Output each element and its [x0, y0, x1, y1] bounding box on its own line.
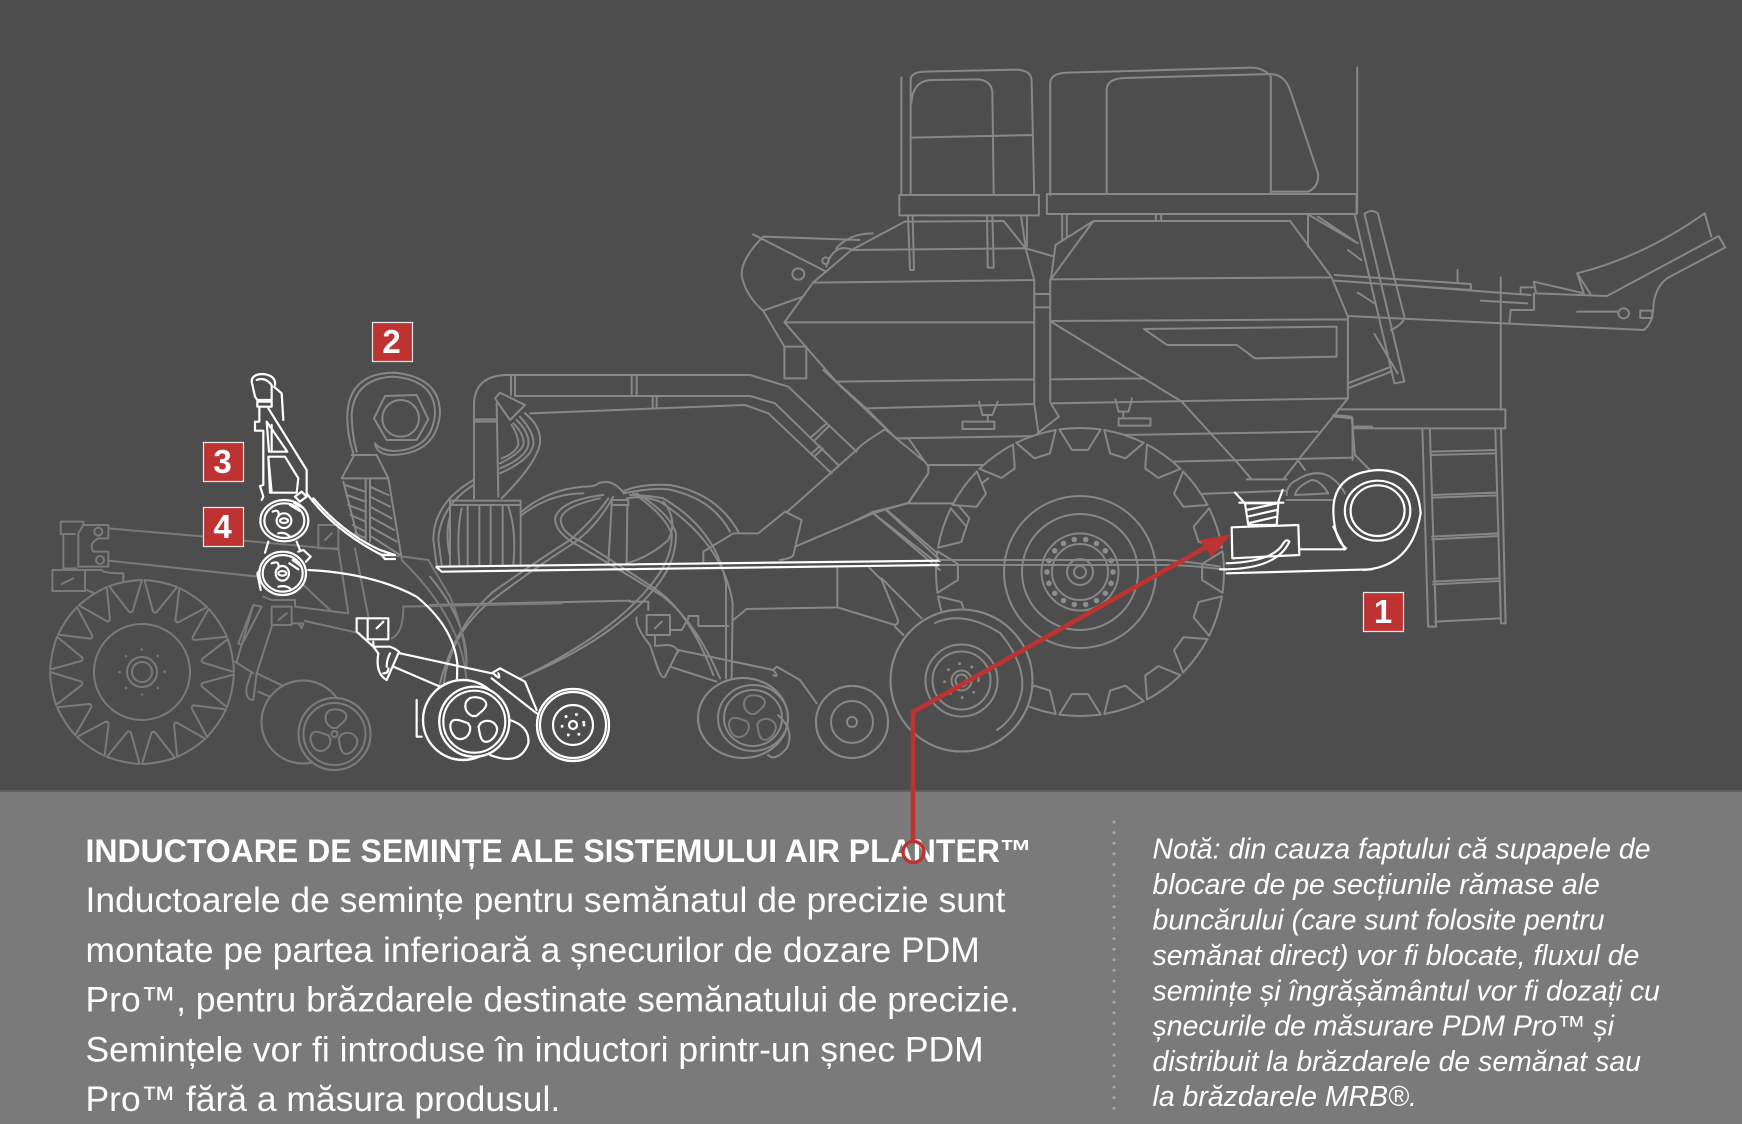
rear opener: gray disc and gauge wheel [698, 678, 888, 758]
note text block: semănat direct) vor fi blocate, fluxul de [1152, 940, 1639, 972]
badge 2: 2 [382, 323, 401, 360]
gray hose continuation through tire [940, 560, 1227, 570]
arrow: callout from heading to seed meter [903, 534, 1231, 862]
white highlighted seed hoses [437, 561, 940, 572]
badge 3: 3 [213, 443, 232, 480]
hopper funnel and lower structure [850, 415, 1372, 567]
inductor column, highlighted [252, 374, 395, 595]
pipes, hoses and central frame [430, 370, 940, 703]
blower and auger [342, 373, 440, 558]
panel: dark illustration background [0, 0, 1742, 792]
panel: lower text background [0, 792, 1742, 1124]
note text block: la brăzdarele MRB®. [1152, 1081, 1417, 1113]
ladder [1422, 428, 1506, 627]
main text block: montate pe partea inferioară a șnecurilor de dozare PDM [86, 930, 980, 970]
seed hose to opener [308, 570, 537, 759]
main text block: Pro™ fără a măsura produsul. [86, 1079, 560, 1119]
note text block: buncărului (care sunt folosite pentru [1152, 904, 1605, 936]
note text block: Notă: din cauza faptului că supapele de [1152, 834, 1651, 866]
main text block [86, 880, 1019, 1119]
note text block: semințe și îngrășământul vor fi dozați cu [1152, 976, 1660, 1008]
highlighted opener discs [423, 680, 609, 761]
dotted divider [1112, 822, 1116, 1110]
seed meter, auger and fan, highlighted [1220, 490, 1372, 573]
left hitch frame and packer wheels [52, 522, 562, 700]
wheel: front gauge wheel [890, 610, 1032, 752]
rear tractor wheel [49, 579, 235, 765]
main text block: Semințele vor fi introduse în inductori printr-un șnec PDM [86, 1030, 984, 1070]
note text block: șnecurile de măsurare PDM Pro™ și [1152, 1010, 1615, 1042]
main text block: Pro™, pentru brăzdarele destinate semănatului de precizie. [86, 980, 1019, 1020]
badge 1 [1364, 592, 1404, 632]
badge 3 [204, 442, 244, 482]
heading: INDUCTOARE DE SEMINȚE ALE SISTEMULUI AIR PLANTER™ [86, 833, 1032, 869]
badge 2 [372, 322, 412, 362]
wheel: large rear tractor tire [936, 428, 1224, 716]
note text block [1152, 834, 1660, 1113]
badge 1: 1 [1374, 593, 1392, 630]
badge 4: 4 [213, 508, 232, 545]
hoppers and railings [742, 68, 1725, 460]
badge 4 [204, 508, 244, 546]
note text block: blocare de pe secțiunile rămase ale [1152, 869, 1600, 901]
note text block: distribuit la brăzdarele de semănat sau [1152, 1046, 1641, 1078]
main text block: Inductoarele de semințe pentru semănatul de precizie sunt [86, 880, 1006, 920]
illustration: air planter machine [49, 68, 1725, 770]
